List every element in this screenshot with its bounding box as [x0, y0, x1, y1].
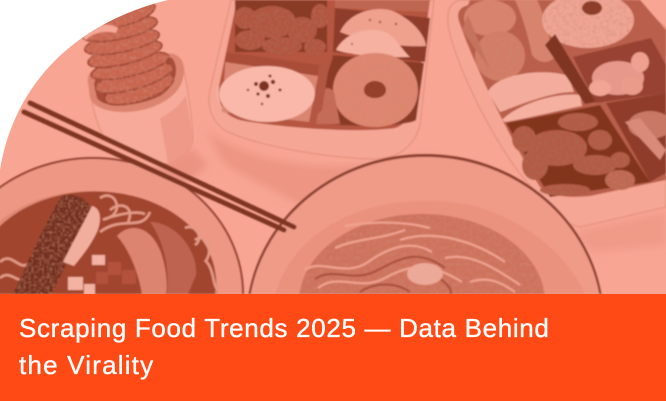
- icon: bento tray right: [448, 0, 666, 227]
- icon: bento tray left: [209, 0, 434, 159]
- title: [19, 313, 550, 380]
- dumplings: [488, 72, 574, 112]
- icon: ramen bowl right: [248, 154, 602, 294]
- shadows: [212, 138, 356, 203]
- top right food: [335, 0, 430, 12]
- grilled corn: [13, 195, 90, 294]
- title: the Virality: [19, 350, 154, 380]
- donut compartment: [320, 55, 424, 126]
- food photo with duotone tint: [0, 0, 666, 294]
- icon: cup of onion rings: [78, 0, 193, 164]
- icon: ramen bowl left: [0, 157, 244, 294]
- rice compartment: [222, 62, 318, 122]
- title banner: [0, 294, 666, 401]
- chashu pork: [117, 228, 167, 294]
- icon: chopsticks: [24, 103, 294, 230]
- bottom right compartment: [606, 93, 666, 182]
- dumplings compartment: [333, 8, 430, 62]
- small top right compartment: [573, 38, 666, 103]
- top food: [464, 0, 634, 81]
- divider dark wall: [545, 34, 596, 104]
- title: Scraping Food Trends 2025 — Data Behind: [19, 313, 550, 343]
- toppings: [96, 262, 136, 284]
- chicken compartment: [235, 0, 327, 52]
- chicken compartment: [506, 105, 650, 197]
